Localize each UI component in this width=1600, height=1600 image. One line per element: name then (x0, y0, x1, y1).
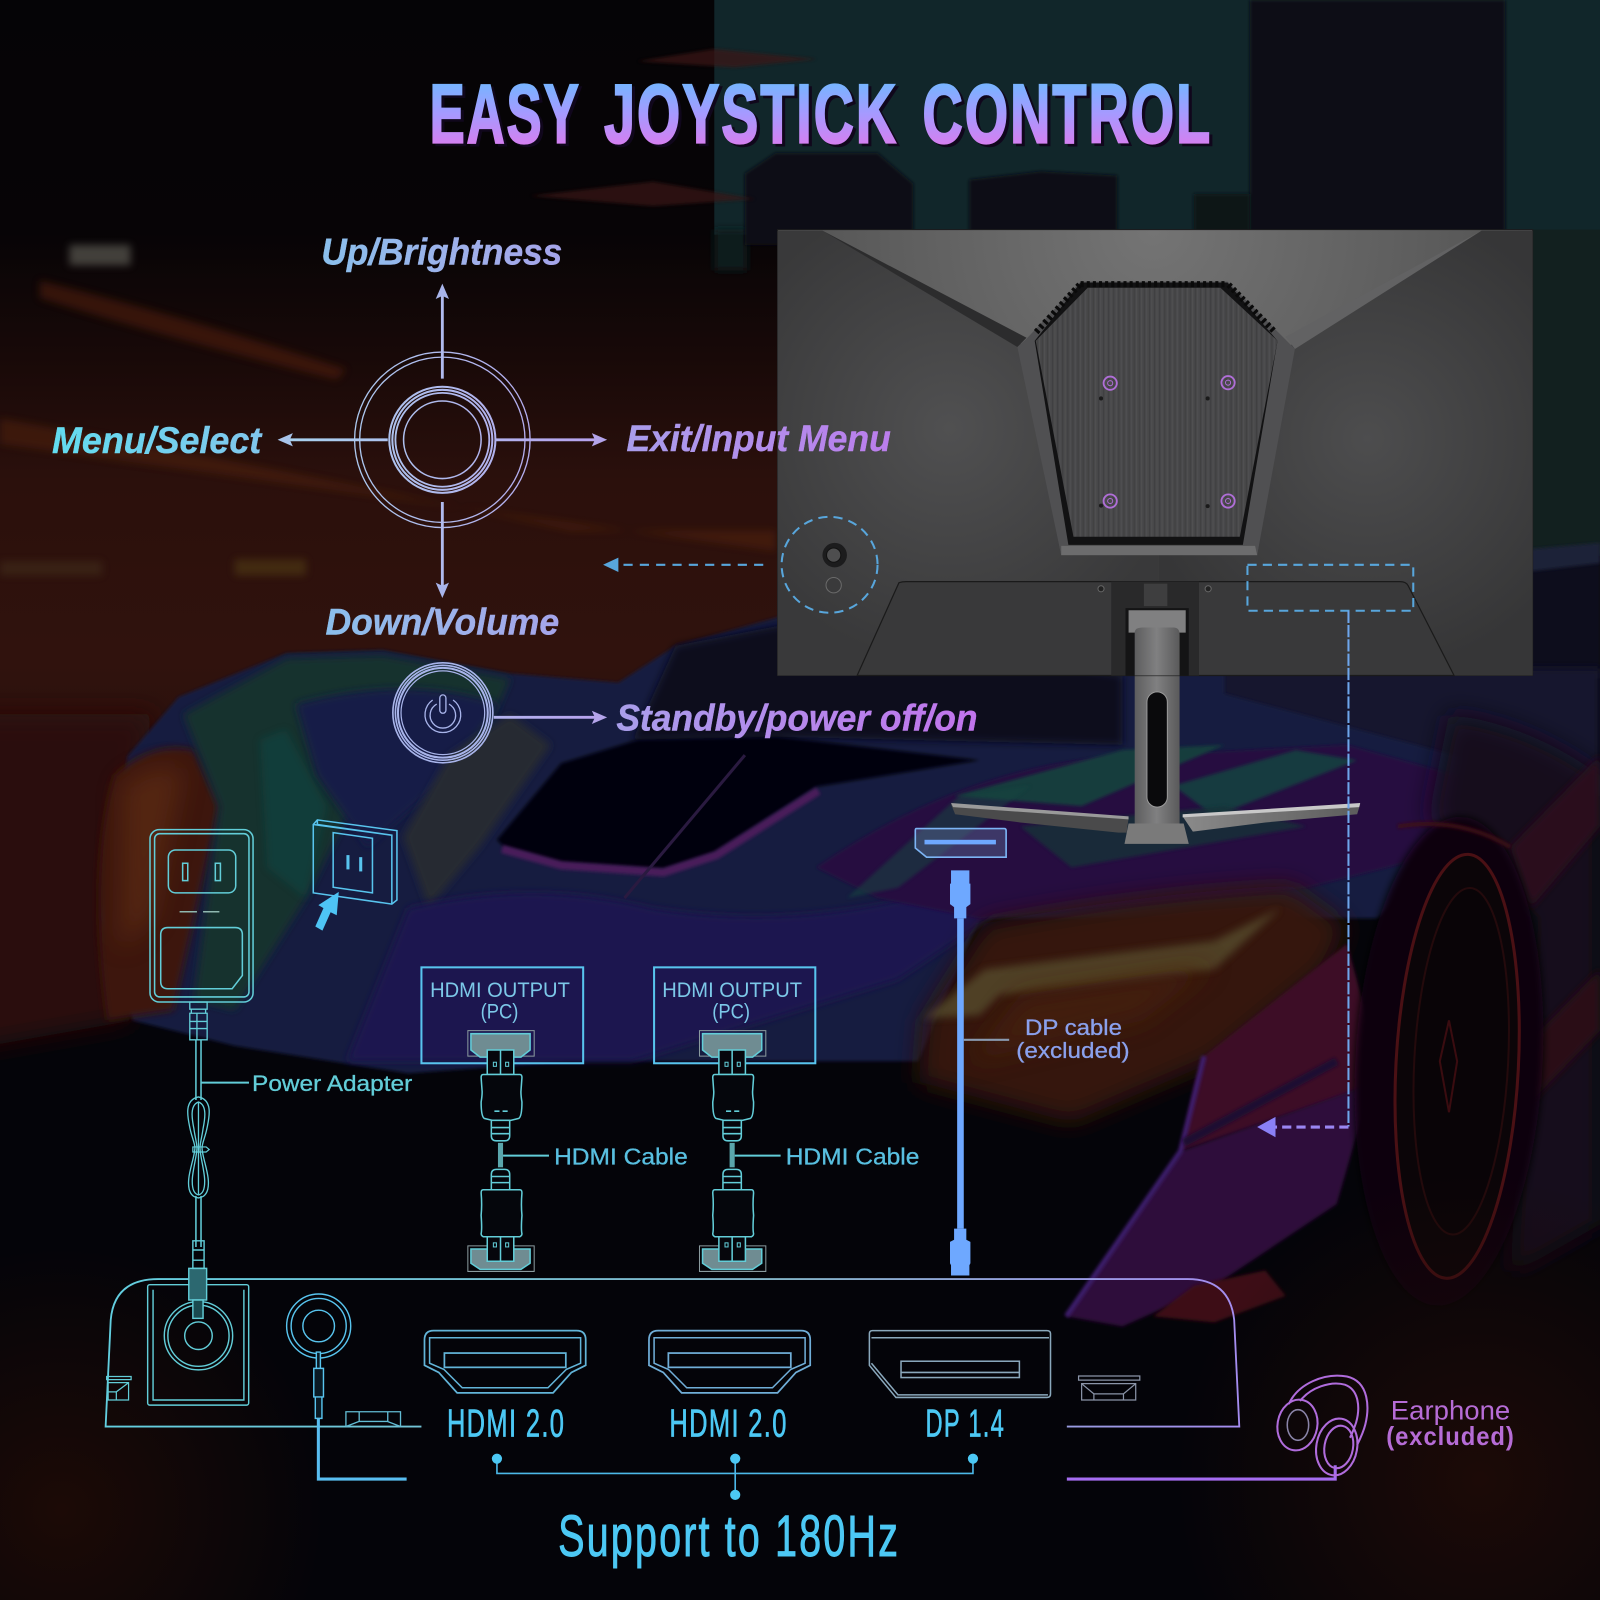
right of monitor and upper body (1531, 556, 1600, 679)
title: CONTROL (922, 66, 1212, 160)
rear wing and right body (1531, 543, 1600, 571)
label: power adapter: Power Adapter (252, 1071, 413, 1096)
bevel (1017, 282, 1295, 555)
dark vent (497, 737, 980, 869)
lower cover (857, 582, 1454, 676)
power jack (148, 1241, 249, 1405)
earphone line (1067, 1465, 1335, 1479)
bottom glow (1122, 1173, 1600, 1600)
icon: headphones (1273, 1376, 1367, 1479)
DP port (869, 1331, 1051, 1397)
small left clip (107, 1377, 131, 1400)
VESA holes (1104, 376, 1235, 508)
callout: DP cable: (excluded) (1016, 1038, 1130, 1063)
dashed arrow: joystick callout (603, 558, 763, 572)
label: earphone: (excluded) (1386, 1423, 1515, 1451)
port label: HDMI 1: HDMI 2.0 (447, 1403, 565, 1446)
callout: DP cable (964, 1015, 1130, 1063)
DP cable (950, 870, 970, 1276)
left: brown area fades to black (0, 714, 153, 1051)
HDMI source 2: HDMI OUTPUT (662, 979, 802, 1002)
HDMI source 2 (654, 967, 815, 1063)
HDMI source 1: (PC) (481, 1000, 518, 1023)
brushed panel (1036, 288, 1278, 537)
dark area above vent (633, 622, 1122, 745)
panel: monitor rear ports (106, 1241, 1239, 1479)
label: standby: Standby/power off/on (616, 698, 978, 739)
monitor stand (951, 633, 1360, 844)
callout: HDMI cable 2: HDMI Cable (786, 1143, 919, 1169)
dashed box: ports location with arrow (1247, 565, 1413, 1137)
purple hood and green stripes right (816, 745, 1531, 918)
callout: DP cable: DP cable (1025, 1015, 1122, 1040)
support text: Support to 180Hz (558, 1504, 900, 1569)
HDMI cable 2 (699, 1031, 766, 1271)
car body (102, 612, 1531, 1073)
small right bracket (1079, 1376, 1140, 1400)
HDMI source 1: HDMI OUTPUT (430, 979, 570, 1002)
side panel, red and purple (1181, 944, 1373, 1151)
arrows: four directions (278, 284, 607, 598)
HDMI source 2: (PC) (712, 1000, 750, 1023)
label: up: Up/Brightness (321, 231, 562, 272)
label: exit: Exit/Input Menu (627, 418, 891, 459)
HDMI port 2 (649, 1331, 810, 1393)
wall socket (313, 820, 397, 931)
icon: joystick rings (355, 352, 530, 528)
power adapter (150, 830, 253, 1247)
bracket joining ports (492, 1454, 978, 1500)
title: JOYSTICK (607, 69, 901, 163)
title: EASY (430, 66, 581, 160)
audio line (318, 1418, 407, 1479)
callout: HDMI cable 1: HDMI Cable (554, 1143, 688, 1169)
audio jack (287, 1294, 351, 1418)
label: menu: Menu/Select (52, 420, 263, 461)
port panel outline (106, 1279, 1239, 1427)
icon: power button (393, 663, 493, 763)
arrow: standby (494, 711, 607, 724)
title: JOYSTICK (604, 66, 898, 160)
arrow: plug direction (315, 892, 339, 931)
wheel (1342, 812, 1556, 1311)
title: EASY (433, 69, 584, 163)
DP port icon (915, 829, 1006, 857)
dashed circle: joystick location (782, 517, 878, 613)
port label: HDMI 2: HDMI 2.0 (669, 1403, 788, 1446)
HDMI source 1 (421, 967, 583, 1063)
title (430, 66, 1215, 163)
small bracket (346, 1412, 401, 1427)
HDMI cable 1 (468, 1031, 534, 1271)
monitor rear view (778, 230, 1533, 844)
label: earphone (1386, 1395, 1515, 1451)
headlight glow (918, 886, 1347, 1122)
panel: joystick control diagram (52, 231, 978, 763)
label: down: Down/Volume (326, 602, 559, 643)
joystick on monitor (822, 543, 847, 593)
label: earphone: Earphone (1391, 1395, 1510, 1425)
HDMI port 1 (424, 1331, 586, 1393)
port label: DP: DP 1.4 (926, 1403, 1005, 1446)
title: CONTROL (926, 69, 1215, 163)
